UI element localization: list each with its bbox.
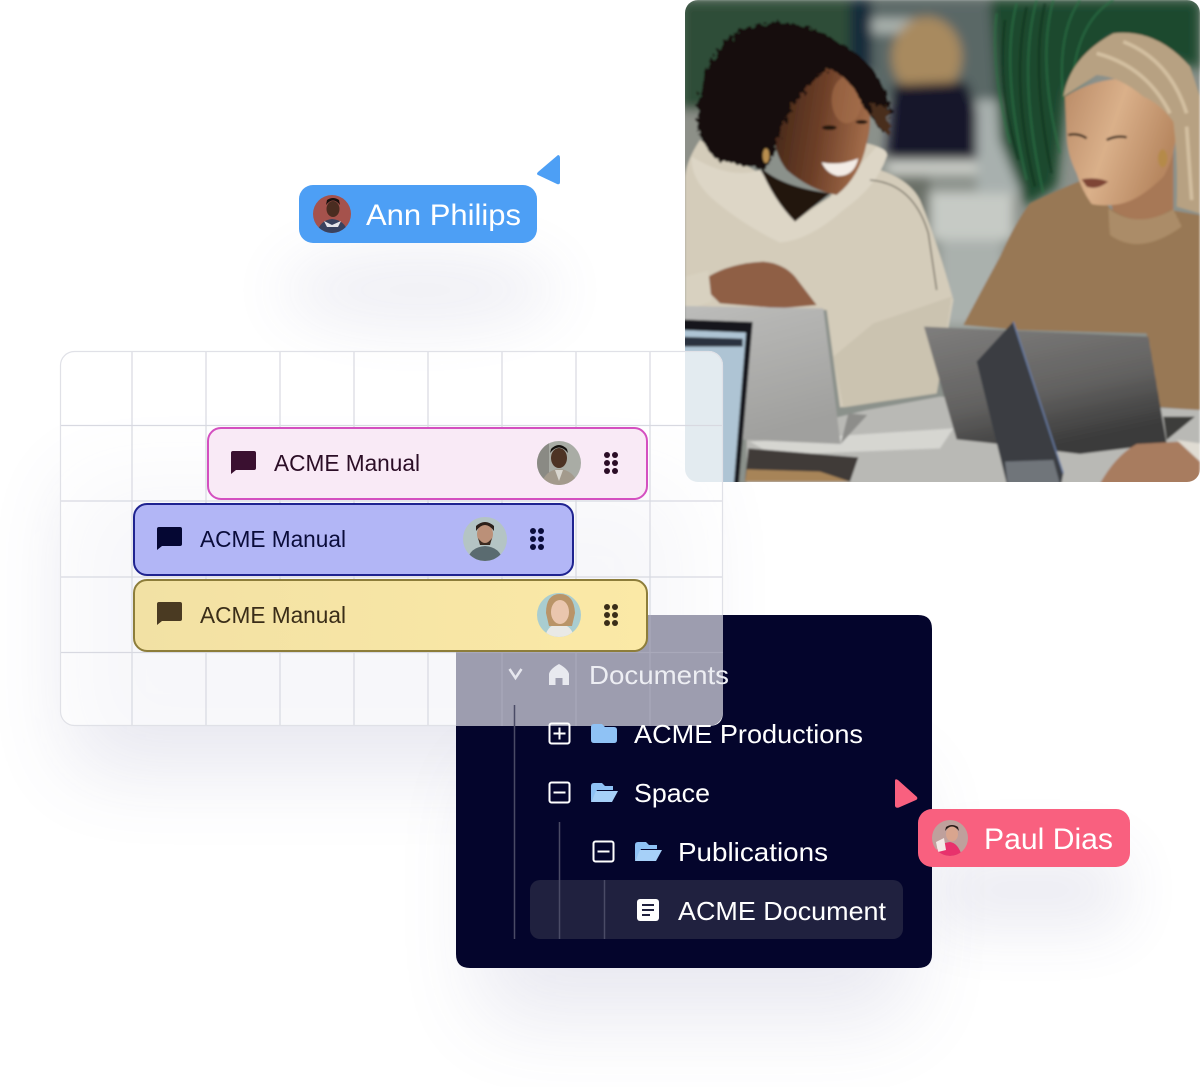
name: Ann Philips — [366, 199, 521, 232]
avatar: man — [537, 441, 581, 485]
soft drop shadows — [70, 248, 1125, 1020]
row: ACME Document: ACME Document — [678, 896, 887, 926]
phone — [745, 448, 858, 482]
avatar: Paul — [932, 820, 968, 856]
right woman sweater — [963, 178, 1200, 411]
photo: two women working on laptops — [680, 0, 1200, 490]
task card: yellow — [134, 580, 647, 651]
user tag: Ann Philips — [299, 185, 537, 243]
front left laptop — [680, 319, 753, 490]
left woman hand — [708, 262, 817, 308]
row: Publications: Publications — [678, 837, 828, 867]
user tag: Paul Dias — [918, 809, 1130, 867]
card label: ACME Manual — [200, 602, 346, 628]
icon: comment — [231, 451, 256, 474]
right woman neck — [1111, 153, 1174, 220]
avatar: woman — [537, 593, 581, 637]
left woman curly hair — [697, 22, 892, 170]
avatar: Ann — [313, 195, 351, 233]
selected row highlight — [530, 880, 903, 939]
drag handle — [604, 604, 618, 626]
dark file tree panel — [456, 615, 932, 968]
task card: blue — [134, 504, 573, 575]
table — [747, 397, 1200, 490]
icon: comment — [157, 527, 182, 550]
tree guide lines — [514, 705, 604, 939]
row: Publications — [594, 837, 828, 867]
left laptop — [685, 306, 841, 444]
row: ACME Productions: ACME Productions — [634, 719, 863, 749]
blurred cafe background — [680, 0, 1200, 327]
task card: pink — [208, 428, 647, 499]
front tablet — [977, 322, 1063, 490]
drag handle — [530, 528, 544, 550]
card label: ACME Manual — [274, 450, 420, 476]
row: Space: Space — [634, 778, 710, 808]
left woman face — [773, 67, 870, 195]
grid panel — [60, 351, 723, 726]
card label: ACME Manual — [200, 526, 346, 552]
row: Documents — [510, 660, 729, 690]
row: Space — [550, 778, 710, 808]
avatar: man with beard — [463, 517, 507, 561]
name: Paul Dias — [984, 823, 1113, 856]
drag handle — [604, 452, 618, 474]
cursor: pink — [895, 779, 917, 808]
left woman hoodie — [685, 140, 953, 407]
right laptop — [924, 327, 1167, 454]
right woman face and hair — [1065, 79, 1177, 205]
right hand — [1100, 440, 1200, 482]
cursor: blue — [537, 155, 560, 184]
row: Documents: Documents — [589, 660, 729, 690]
icon: comment — [157, 602, 182, 625]
